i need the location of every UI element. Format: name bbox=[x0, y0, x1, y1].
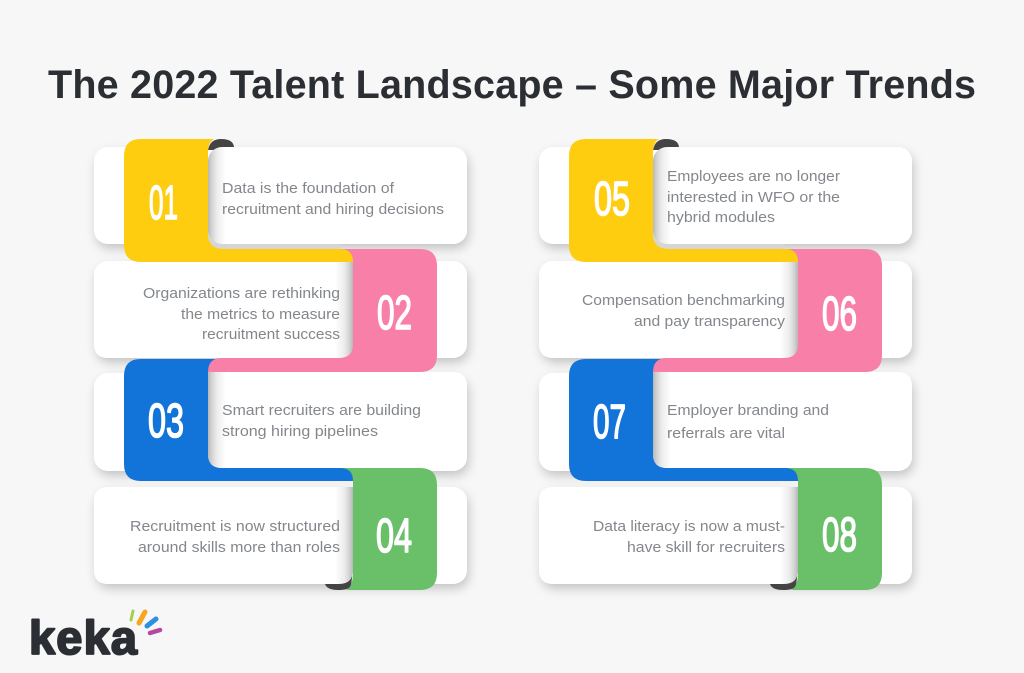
panel: trend 05: 05 bbox=[594, 173, 630, 226]
title: The 2022 Talent Landscape – Some Major Trends bbox=[48, 63, 976, 107]
panel: trend 01 bbox=[124, 139, 467, 262]
panel: trend 08: have skill for recruiters bbox=[627, 539, 785, 556]
panel: trend 02: the metrics to measure bbox=[181, 306, 340, 323]
panel: trend 06: Compensation benchmarking bbox=[582, 292, 785, 309]
panel: trend 07: 07 bbox=[593, 396, 626, 449]
panel: trend 07 bbox=[569, 359, 912, 481]
panel: trend 06: 06 bbox=[822, 288, 857, 341]
panel: trend 01: recruitment and hiring decisions bbox=[222, 201, 444, 218]
panel: trend 02: Organizations are rethinking bbox=[143, 285, 340, 302]
panel: trend 02: 02 bbox=[377, 287, 412, 340]
panel: trend 03 bbox=[124, 359, 467, 481]
panel: trend 08: 08 bbox=[822, 509, 857, 562]
panel: trend 07: Employer branding and bbox=[667, 402, 829, 419]
panel: trend 06 bbox=[539, 249, 882, 372]
panel: trend 05 bbox=[569, 139, 912, 262]
panel: trend 08 bbox=[539, 468, 882, 590]
panel: trend 03: strong hiring pipelines bbox=[222, 423, 378, 440]
panel: trend 07: referrals are vital bbox=[667, 425, 785, 442]
panel: trend 05: hybrid modules bbox=[667, 209, 775, 226]
panel: trend 02: recruitment success bbox=[202, 326, 340, 343]
panel: trend 01: Data is the foundation of bbox=[222, 180, 395, 197]
panel: trend 03: Smart recruiters are building bbox=[222, 402, 421, 419]
panel: trend 04: around skills more than roles bbox=[138, 539, 340, 556]
panel: trend 02 bbox=[94, 249, 437, 372]
panel: trend 03: 03 bbox=[148, 395, 184, 448]
panel: trend 04: 04 bbox=[376, 510, 412, 563]
logo: keka: keka bbox=[29, 611, 138, 664]
panel: trend 05: interested in WFO or the bbox=[667, 189, 840, 206]
card backgrounds bbox=[94, 147, 912, 584]
panel: trend 04 bbox=[94, 468, 437, 590]
panel: trend 01: 01 bbox=[149, 177, 178, 230]
panel: trend 06: and pay transparency bbox=[634, 313, 786, 330]
panel: trend 04: Recruitment is now structured bbox=[130, 518, 340, 535]
panel: trend 05: Employees are no longer bbox=[667, 168, 840, 185]
panel: trend 08: Data literacy is now a must- bbox=[593, 518, 785, 535]
